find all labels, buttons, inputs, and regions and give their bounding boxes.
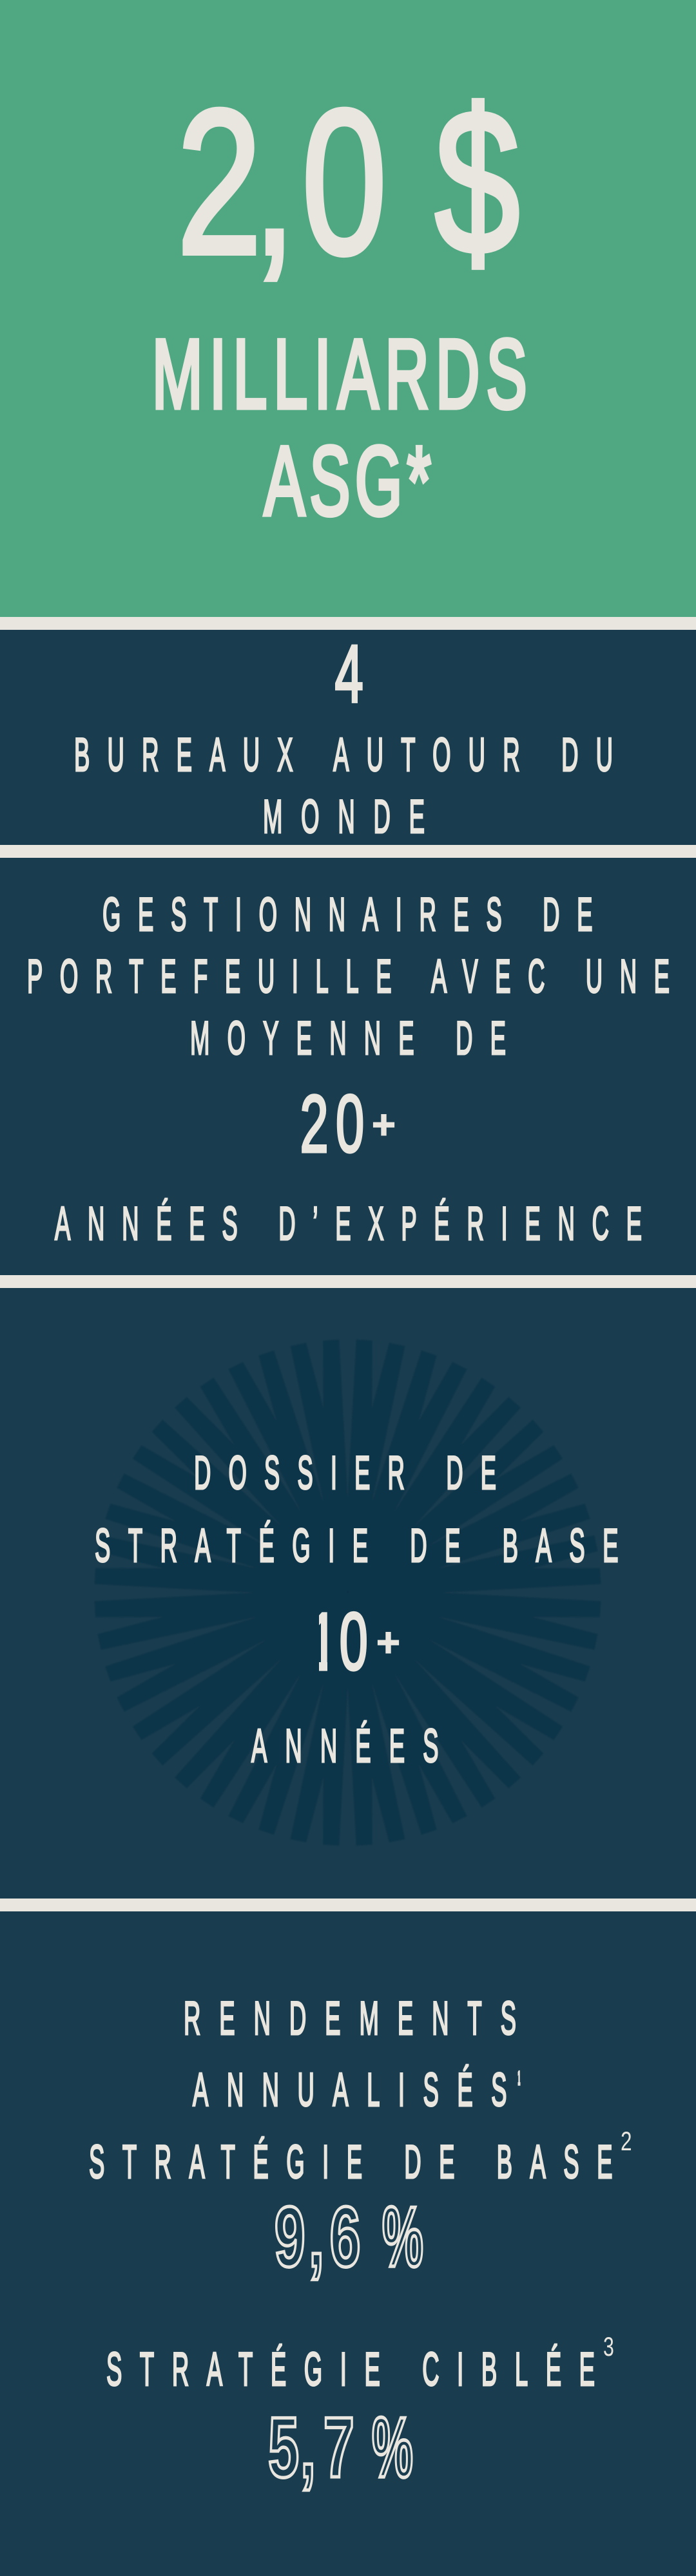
text: rendements: RENDEMENTS [184,1993,516,2045]
text: gestionnaires de: GESTIONNAIRES DE [102,889,593,941]
big number: 10+: + [377,1621,400,1664]
footnote mark 2: 2 [621,2126,632,2156]
footnote mark 1: 1 [517,2067,521,2089]
icon: sunburst [88,1333,607,1852]
value: 5,7 % [268,2399,413,2496]
panel: annualized returns [89,1993,632,2496]
text: annualisés: ANNUALISÉS [193,2064,507,2116]
big number: 20+: + [372,1103,395,1146]
big number: 20+ [300,1079,395,1170]
heading: milliards: MILLIARDS [152,319,527,428]
text: stratégie de base: STRATÉGIE DE BASE [89,2136,613,2188]
text: stratégie de base: STRATÉGIE DE BASE [95,1520,619,1572]
big number: 2,0 $: 2,0 $ [177,66,520,297]
footnote mark 3: 3 [603,2331,614,2362]
value: 5,7 %: % [372,2399,413,2496]
value: 5,7 %: 5,7 [268,2399,354,2495]
big number: 4: 4 [335,629,363,719]
text: portefeuille avec une: PORTEFEUILLE AVEC UNE [27,951,670,1003]
text: bureaux autour du: BUREAUX AUTOUR DU [74,729,613,781]
big number: 10+: 10 [309,1597,368,1687]
panel: core strategy track record [88,1333,619,1852]
panel: portfolio managers [27,889,670,1250]
text: dossier de: DOSSIER DE [194,1447,496,1499]
panel: assets under management [0,0,696,617]
text: monde: MONDE [263,791,425,843]
text: années d'expérience: ANNÉES D’EXPÉRIENCE [55,1198,642,1250]
big number: 20+: 20 [300,1079,364,1170]
value: 9,6 %: 9,6 [275,2188,361,2284]
text: années: ANNÉES [251,1720,438,1772]
panel: offices [74,629,613,843]
value: 9,6 %: % [382,2188,423,2285]
text: moyenne de: MOYENNE DE [190,1012,506,1065]
heading: ASG: ASG* [264,426,431,535]
big number: 10+ [319,1611,400,1672]
text: stratégie ciblée: STRATÉGIE CIBLÉE [106,2344,595,2396]
value: 9,6 % [275,2188,423,2285]
